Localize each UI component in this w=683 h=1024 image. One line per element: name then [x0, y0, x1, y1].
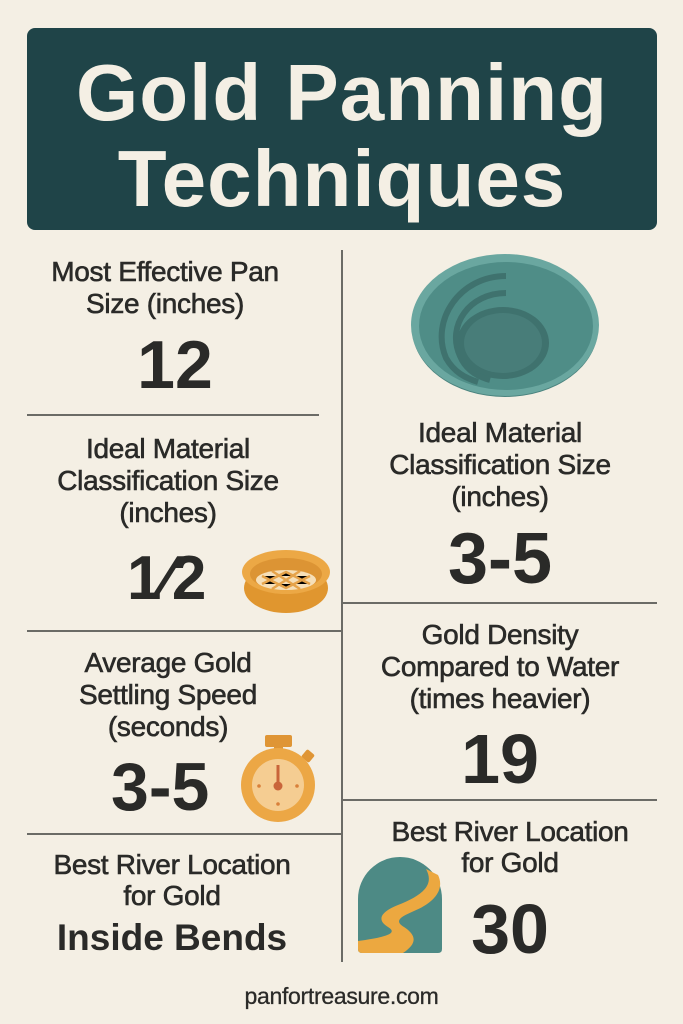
footer: panfortreasure.com	[244, 983, 439, 1009]
value: 30	[471, 890, 549, 968]
label: (seconds)	[108, 711, 228, 742]
label	[57, 433, 279, 528]
icon: river	[358, 857, 442, 953]
label	[381, 619, 620, 714]
label: for Gold	[461, 847, 559, 878]
label: Size (inches)	[86, 288, 244, 319]
icon: stopwatch	[241, 735, 315, 822]
label: Ideal Material	[86, 433, 250, 464]
panel: gold density	[381, 619, 620, 798]
title: Gold Panning	[76, 48, 608, 137]
icon: gold pan	[411, 254, 599, 397]
panel: settling speed	[79, 647, 315, 825]
panel: classification right	[389, 417, 611, 599]
label	[391, 816, 629, 878]
label: (inches)	[119, 497, 217, 528]
panel: river location right	[358, 816, 629, 968]
label: Average Gold	[84, 647, 252, 678]
label: Gold Density	[422, 619, 578, 650]
label: Best River Location	[53, 849, 291, 880]
panel: pan size	[51, 256, 279, 403]
label: (inches)	[451, 481, 549, 512]
label	[51, 256, 279, 320]
value: 12	[137, 327, 213, 403]
title: Techniques	[118, 134, 566, 223]
label: Most Effective Pan	[51, 256, 279, 287]
value: 3-5	[448, 519, 552, 599]
label: (times heavier)	[410, 683, 590, 714]
value: Inside Bends	[57, 917, 287, 958]
value: 19	[461, 720, 539, 798]
label: Settling Speed	[79, 679, 257, 710]
label	[79, 647, 257, 742]
panel: river location left	[53, 849, 291, 958]
label	[389, 417, 611, 512]
value: 1⁄2	[127, 544, 206, 613]
panel: classification left	[57, 433, 330, 613]
label	[53, 849, 291, 911]
label: Ideal Material	[418, 417, 582, 448]
label: Classification Size	[57, 465, 279, 496]
icon: sieve	[242, 550, 330, 613]
value: 3-5	[111, 749, 209, 825]
label: Compared to Water	[381, 651, 619, 682]
label: Best River Location	[391, 816, 629, 847]
title	[27, 28, 657, 230]
label: for Gold	[123, 880, 221, 911]
label: Classification Size	[389, 449, 611, 480]
